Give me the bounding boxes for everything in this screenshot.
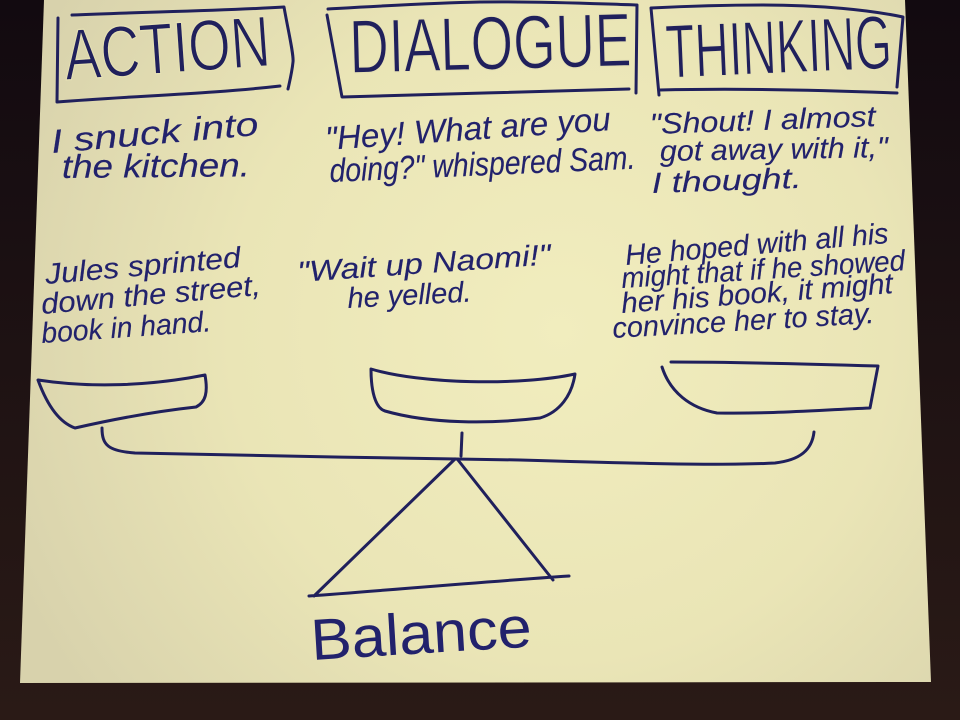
- text block: dialogue example 2: he yelled.: [347, 277, 472, 315]
- text block: action example 1: I snuck into: [49, 105, 260, 160]
- text block: thinking example 2: [612, 218, 907, 345]
- text block: action example 2: Jules sprinted: [43, 242, 243, 291]
- text block: dialogue example 1: [324, 100, 636, 189]
- panel: dialogue heading: [327, 0, 637, 97]
- text block: action example 1: the kitchen.: [62, 146, 250, 185]
- left pan: [38, 375, 206, 428]
- middle pan: [371, 369, 575, 422]
- text block: dialogue example 1: doing?" whispered Sam.: [329, 139, 636, 189]
- text block: action example 2: [40, 242, 262, 350]
- text block: thinking example 1: got away with it,": [660, 132, 890, 168]
- text block: dialogue example 1: "Hey! What are you: [324, 100, 612, 157]
- panel: action heading: ACTION: [62, 2, 273, 96]
- text block: thinking example 2: He hoped with all his: [624, 218, 890, 272]
- text block: thinking example 1: "Shout! I almost: [649, 101, 878, 141]
- text block: thinking example 2: convince her to stay.: [612, 298, 875, 345]
- triangle fulcrum: [309, 459, 569, 596]
- text block: thinking example 1: I thought.: [651, 163, 802, 200]
- text block: dialogue example 2: [296, 239, 554, 315]
- text block: thinking example 1: [649, 101, 890, 200]
- text block: thinking example 2: might that if he showed: [620, 245, 907, 295]
- text block: action example 2: down the street,: [40, 270, 262, 321]
- text block: dialogue example 2: "Wait up Naomi!": [296, 239, 554, 289]
- label: balance: Balance: [309, 595, 533, 673]
- right pan: [662, 362, 878, 413]
- text block: action example 1: [49, 105, 260, 185]
- beam post: [461, 433, 462, 456]
- beam: [102, 428, 814, 464]
- text block: thinking example 2: her his book, it might: [620, 268, 896, 320]
- text block: action example 2: book in hand.: [40, 306, 212, 350]
- chart: balance scale: [38, 362, 878, 596]
